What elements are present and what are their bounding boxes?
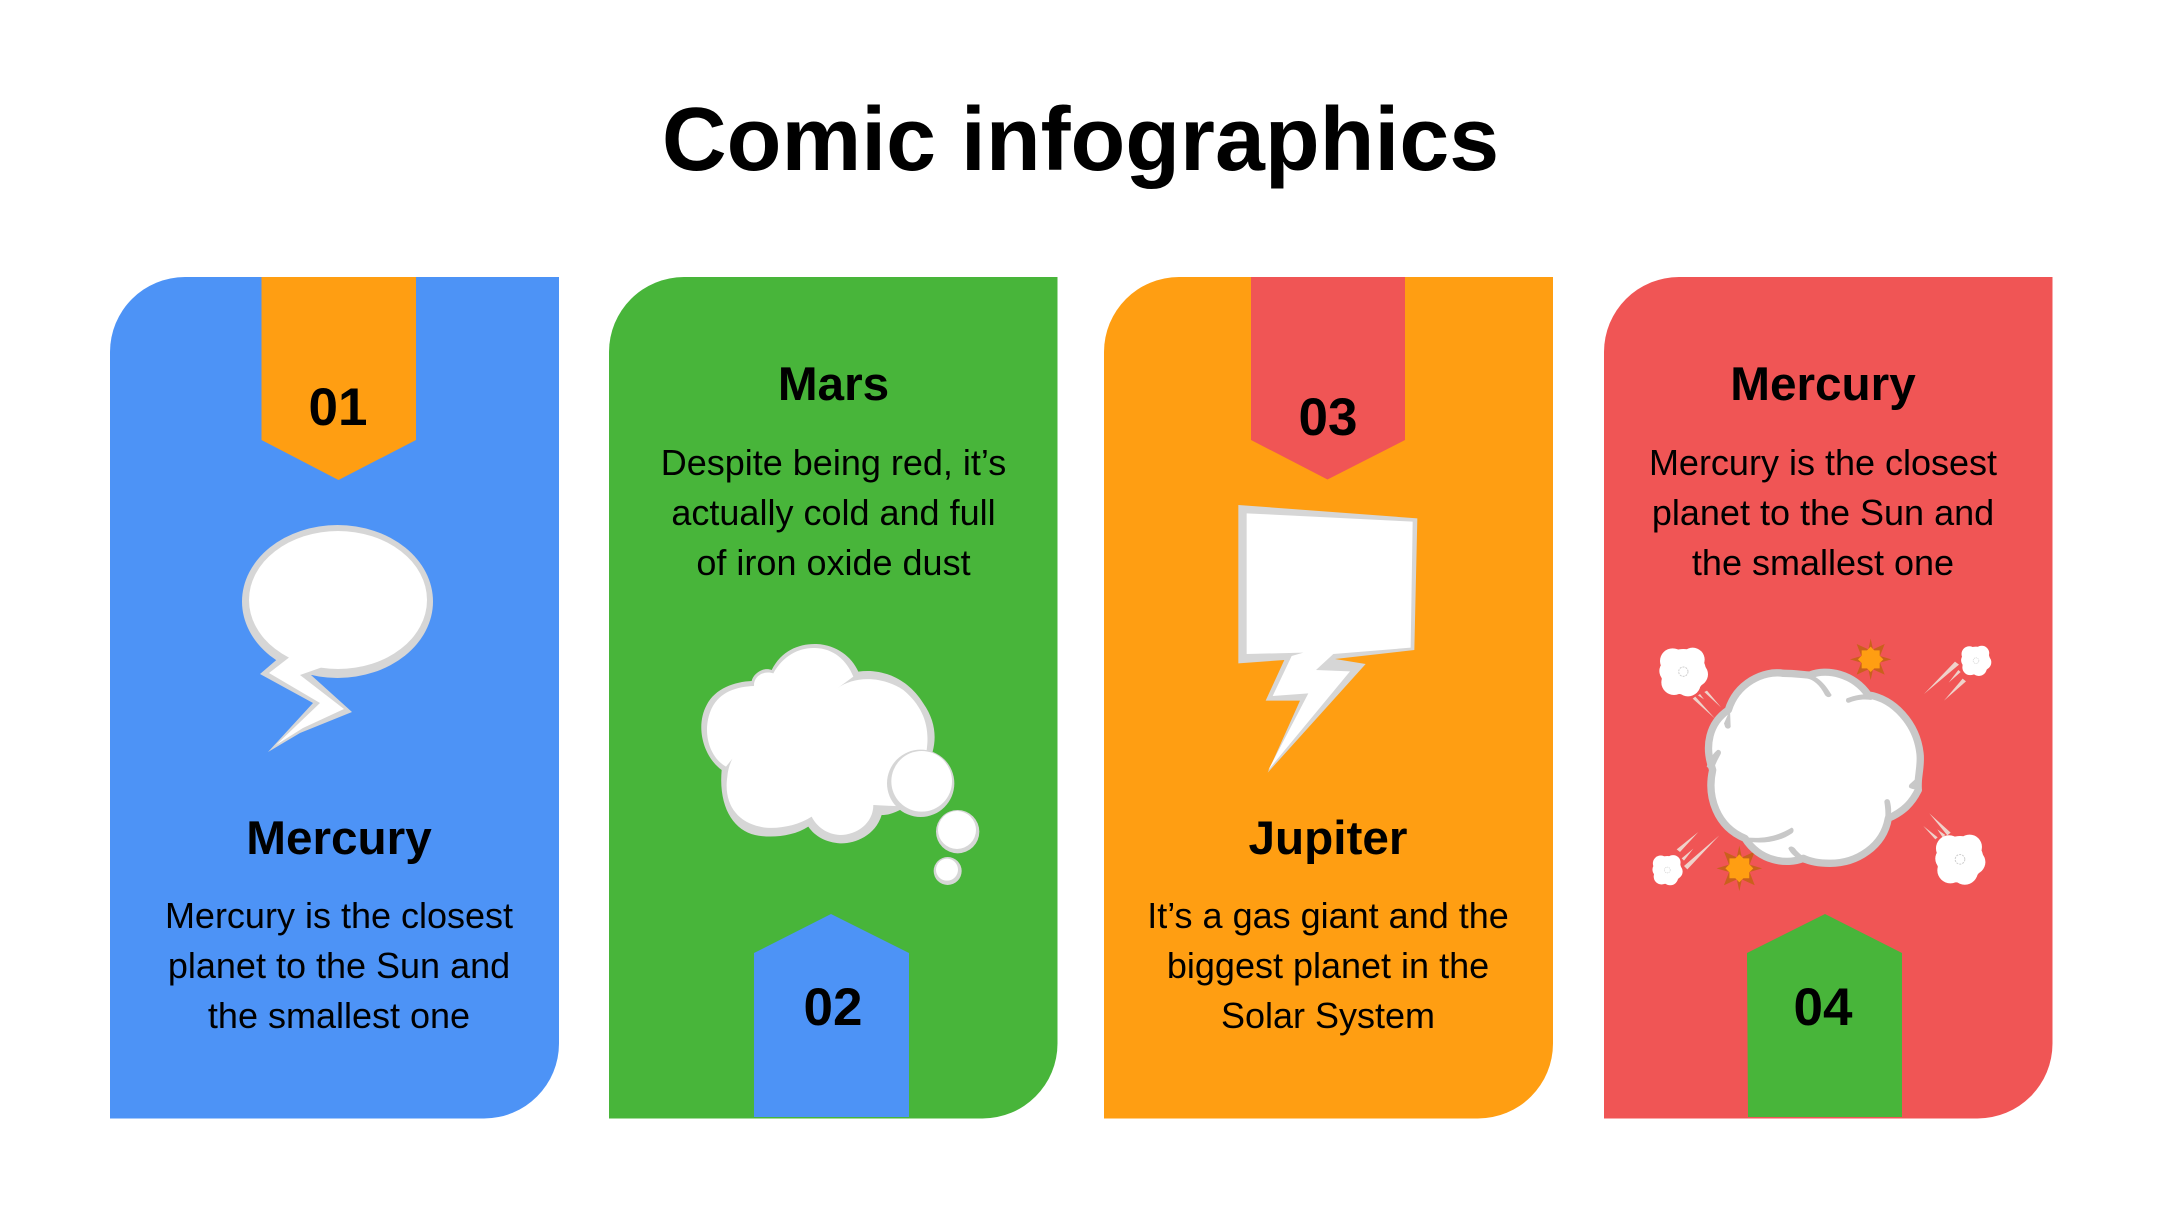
number 01: 01	[309, 378, 367, 437]
cloud fold wedges	[1707, 673, 1922, 865]
description text: the smallest one	[1692, 542, 1954, 583]
main cloud	[1709, 672, 1920, 863]
number banner 02	[754, 914, 909, 1117]
description text: of iron oxide dust	[696, 542, 971, 583]
panel: 02 Mars	[609, 277, 1058, 1118]
small puffs	[1652, 646, 1991, 885]
panel: 04 Mercury	[1604, 277, 2052, 1118]
description text: Mercury is the closest	[1649, 442, 1997, 483]
description text: Solar System	[1221, 995, 1435, 1036]
icon: rectangular speech bubble with lightning tail	[1238, 505, 1417, 773]
description text: Despite being red, it’s	[661, 442, 1006, 483]
number banner 03	[1251, 277, 1405, 480]
number 04: 04	[1794, 978, 1853, 1037]
starbursts	[1717, 639, 1891, 891]
description text: Mercury is the closest	[165, 895, 513, 936]
icon: thought cloud	[701, 644, 979, 885]
description text: actually cold and full	[671, 492, 996, 533]
panel background orange	[1104, 277, 1553, 1118]
panel: 03 Jupiter	[1104, 277, 1553, 1118]
heading: Jupiter: Jupiter	[1248, 812, 1408, 865]
description text: It’s a gas giant and the	[1147, 895, 1509, 936]
panel background red	[1604, 277, 2052, 1118]
description text: planet to the Sun and	[168, 945, 510, 986]
description text: planet to the Sun and	[1652, 492, 1994, 533]
number banner 04	[1747, 914, 1902, 1117]
description text: the smallest one	[208, 995, 470, 1036]
title: Comic infographics	[662, 90, 1499, 190]
panel background green	[609, 277, 1058, 1118]
number banner 01	[262, 277, 416, 480]
number 03: 03	[1299, 388, 1357, 447]
heading: Mercury: Mercury	[246, 812, 432, 865]
heading: Mars: Mars	[778, 358, 889, 411]
panel background blue	[110, 277, 559, 1118]
panel: 01 Mercury	[110, 277, 559, 1118]
icon: speech bubble with lightning tail	[242, 525, 433, 752]
streak lines	[1677, 662, 1966, 869]
number 02: 02	[804, 978, 862, 1037]
heading: Mercury: Mercury	[1730, 358, 1916, 411]
description text: biggest planet in the	[1167, 945, 1489, 986]
icon: comic explosion	[1652, 639, 1991, 891]
